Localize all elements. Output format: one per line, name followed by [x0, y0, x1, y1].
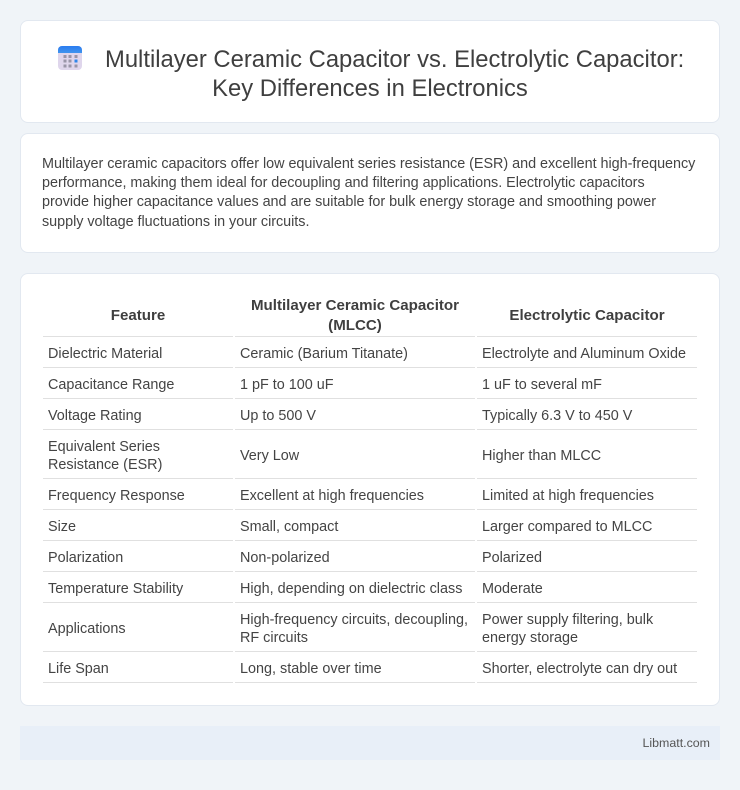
comparison table: Equivalent Series Resistance (ESR) [48, 439, 162, 473]
comparison table: Capacitance Range [48, 377, 174, 393]
intro text [42, 156, 696, 230]
comparison table: Polarization [48, 550, 123, 566]
footer credit: Libmatt.com [643, 736, 710, 750]
comparison table: Long, stable over time [240, 661, 382, 677]
comparison table: High-frequency circuits, decoupling, RF circuits [240, 612, 468, 646]
comparison table: Frequency Response [48, 488, 185, 504]
comparison table: Feature [111, 307, 165, 324]
comparison table: Very Low [240, 448, 299, 464]
comparison table: Temperature Stability [48, 581, 183, 597]
title: Multilayer Ceramic Capacitor vs. Electrolytic Capacitor: [105, 46, 684, 72]
comparison table: 1 uF to several mF [482, 377, 602, 393]
intro text: performance, making them ideal for decoupling and filtering applications. Electrolytic capacitors [42, 175, 645, 191]
comparison table: Dielectric Material [48, 346, 162, 362]
comparison table [43, 297, 697, 683]
intro text: supply voltage fluctuations in your circuits. [42, 214, 309, 230]
icon: calendar [58, 46, 82, 70]
comparison table: High, depending on dielectric class [240, 581, 462, 597]
comparison table: Shorter, electrolyte can dry out [482, 661, 677, 677]
title card [20, 20, 720, 123]
comparison table: Life Span [48, 661, 109, 677]
comparison table: Moderate [482, 581, 543, 597]
comparison table: Ceramic (Barium Titanate) [240, 346, 408, 362]
comparison table: Small, compact [240, 519, 338, 535]
intro text panel [20, 133, 720, 253]
title [105, 46, 684, 102]
comparison table: Non-polarized [240, 550, 330, 566]
comparison table: Voltage Rating [48, 408, 142, 424]
comparison table: Higher than MLCC [482, 448, 601, 464]
comparison table panel [20, 273, 720, 706]
comparison table: Electrolytic Capacitor [509, 307, 665, 324]
comparison table: Excellent at high frequencies [240, 488, 424, 504]
intro text: provide higher capacitance values and are suitable for bulk energy storage and smoothing power [42, 194, 656, 210]
intro text: Multilayer ceramic capacitors offer low equivalent series resistance (ESR) and excellent high-frequency [42, 156, 695, 172]
comparison table: Larger compared to MLCC [482, 519, 652, 535]
comparison table: Size [48, 519, 76, 535]
comparison table: Typically 6.3 V to 450 V [482, 408, 632, 424]
title: Key Differences in Electronics [212, 74, 528, 102]
comparison table: Electrolyte and Aluminum Oxide [482, 346, 686, 362]
comparison table: Limited at high frequencies [482, 488, 654, 504]
comparison table: 1 pF to 100 uF [240, 377, 334, 393]
comparison table: Applications [48, 621, 126, 637]
footer bar [20, 726, 720, 760]
comparison table: Polarized [482, 550, 542, 566]
comparison table: Up to 500 V [240, 408, 316, 424]
comparison table: Power supply filtering, bulk energy storage [482, 612, 653, 646]
comparison table: Multilayer Ceramic Capacitor (MLCC) [251, 297, 459, 334]
